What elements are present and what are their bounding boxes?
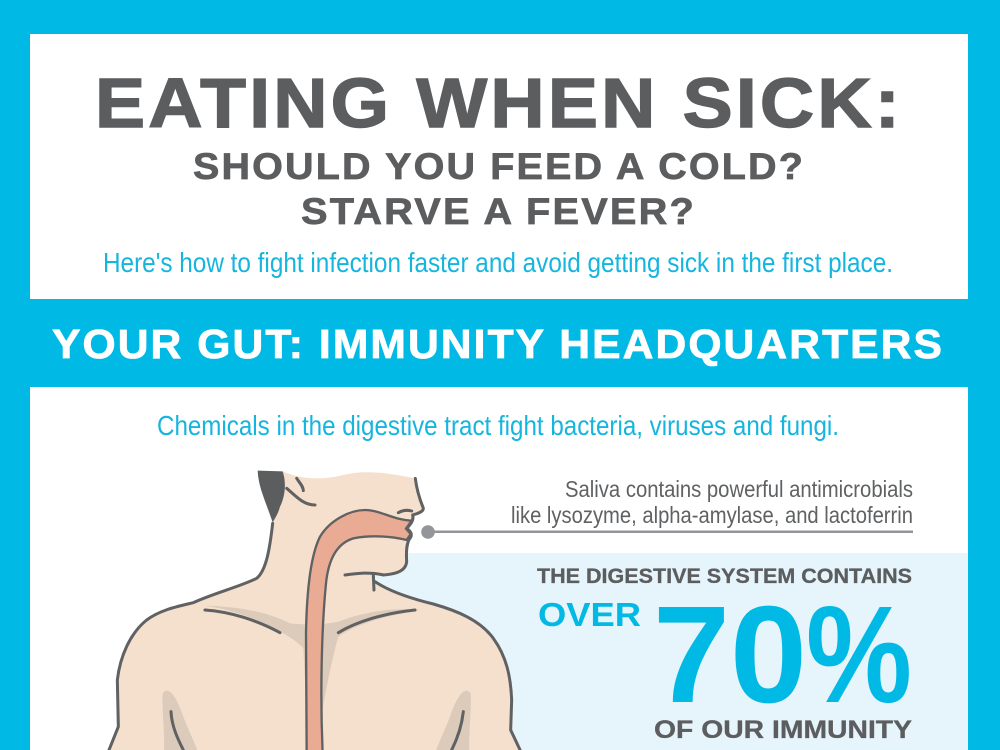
statistic: over 70 percent: 70 [653,578,807,732]
statistic: over 70 percent: OVER [538,596,641,633]
hair [258,471,285,522]
body silhouette [107,471,522,750]
shading: collarbones and chest [205,606,420,713]
callout: saliva: like lysozyme, alpha-amylase, and lactoferrin [511,502,913,528]
callout leader line [428,530,913,533]
illustration: human torso with digestive tract [107,471,522,750]
statistic: over 70 percent [537,565,912,744]
tagline: Here's how to fight infection faster and avoid getting sick in the first place. [103,247,893,278]
section intro text: Chemicals in the digestive tract fight bacteria, viruses and fungi. [157,410,839,441]
digestive tract: mouth and esophagus [306,510,412,750]
panel: gut section [30,387,968,750]
subtitle line 1: SHOULD YOU FEED A COLD? [193,146,805,187]
panel: statistic background [360,553,968,750]
panel: title header [30,34,968,299]
shading: left armpit [162,691,198,750]
statistic: over 70 percent: % [806,578,912,732]
body outlines [108,478,522,750]
title: EATING WHEN SICK: [95,64,903,142]
section heading: YOUR GUT: IMMUNITY HEADQUARTERS [52,321,944,367]
statistic: over 70 percent: OF OUR IMMUNITY [654,716,912,744]
shading: right armpit [435,691,471,750]
subtitle line 2: STARVE A FEVER? [301,191,696,232]
statistic: over 70 percent: THE DIGESTIVE SYSTEM CONTAINS [537,565,912,588]
callout text: Saliva contains powerful antimicrobials [565,476,913,502]
callout: saliva [421,476,913,539]
